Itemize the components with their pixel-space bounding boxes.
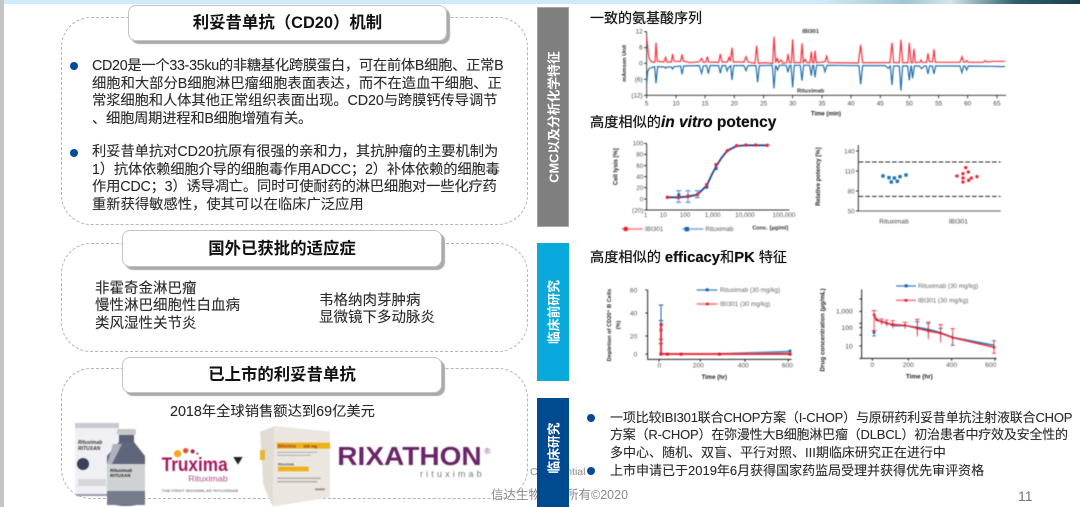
- chart: CD20 B cell depletion: IBI301 (30 mg/kg): [720, 301, 770, 308]
- chart: CD20 B cell depletion: 400: [738, 362, 749, 369]
- text block: CD20 description: CD20是一个33-35ku的非糖基化跨膜蛋白，可在前体B细胞、正常B: [92, 58, 503, 74]
- chart: peptide map chromatogram: 15: [701, 101, 709, 108]
- chart: peptide map chromatogram: 55: [935, 101, 943, 108]
- heading: marketed rituximab: [122, 357, 442, 393]
- chart: cell lysis dose response: 100: [633, 141, 644, 148]
- chart: peptide map chromatogram: (12): [631, 92, 643, 99]
- text block: indications left: 非霍奇金淋巴瘤: [95, 281, 196, 297]
- chart: peptide map chromatogram: 20: [731, 101, 738, 108]
- text block: clinical study: 多中心、随机、双盲、平行对照、III期临床研究正在进行中: [610, 445, 946, 460]
- chart: cell lysis dose response: Cell lysis [%]: [613, 148, 619, 185]
- logo: Rituxan box and vial: RITUXAN: [110, 473, 131, 478]
- chart: drug concentration PK: IBI301 (30 mg/kg): [918, 297, 968, 304]
- logo: Truxima: Rituximab: [188, 473, 228, 483]
- logo: Blitzima box: Rituximab: [278, 462, 294, 466]
- chart: cell lysis dose response: 10: [660, 212, 667, 219]
- text block: CD20 description: 常浆细胞和人体其他正常组织表面出现。CD20与跨膜钙传导调节: [92, 93, 497, 109]
- chart: cell lysis dose response: Conc. [µg/ml]: [752, 225, 788, 231]
- logo: Rituxan box and vial: RITUXAN: [78, 446, 101, 452]
- chart: peptide map chromatogram: 5: [645, 101, 649, 108]
- chart: CD20 B cell depletion: 600: [782, 362, 793, 369]
- logo: Blitzima box: [260, 426, 330, 507]
- chart: peptide map chromatogram: 0: [639, 60, 643, 67]
- chart: peptide map chromatogram: 10: [672, 101, 680, 108]
- chart: relative potency scatter: 110: [845, 168, 855, 175]
- chart: drug concentration PK: Time (hr): [906, 373, 933, 380]
- chart: peptide map chromatogram: 30: [789, 101, 797, 108]
- watermark: confidential: Confidential: [530, 466, 585, 478]
- logo: Rituxan box and vial: Rituximab: [78, 440, 102, 446]
- chart: drug concentration PK: 0: [870, 362, 874, 369]
- text block: filing: 上市申请已于2019年6月获得国家药监局受理并获得优先审评资格: [610, 463, 984, 478]
- heading: in vitro potency: 高度相似的in vitro potency: [590, 114, 776, 131]
- chart: relative potency scatter: IBI301: [949, 218, 968, 225]
- chart: peptide map chromatogram: mAmson Unit: [622, 45, 628, 82]
- logo: Rituxan box and vial: [75, 423, 145, 506]
- text block: rituximab mechanism: 作用CDC；3）诱导凋亡。同时可使耐药的淋巴细胞对一些化疗药: [92, 179, 497, 195]
- logo: Truxima: THE FIRST BIOSIMILAR RITUXIMAB: [162, 489, 239, 493]
- text block: clinical study: [610, 410, 1072, 460]
- chart: CD20 B cell depletion: Time (hr): [702, 375, 727, 381]
- chart: CD20 B cell depletion: Rituximab (30 mg/kg): [720, 287, 780, 294]
- chart: peptide map chromatogram: 65: [993, 101, 1001, 108]
- logo: Rixathon: rituximab: [420, 469, 482, 479]
- chart: cell lysis dose response: 20: [636, 185, 644, 192]
- watermark: copyright: 信达生物版权所有©2020: [491, 488, 628, 502]
- heading: approved indications: 国外已获批的适应症: [208, 240, 356, 258]
- text block: rituximab mechanism: [92, 144, 500, 212]
- chart: cell lysis dose response: [613, 141, 796, 233]
- chart: CD20 B cell depletion: Depletion of CD20⁺ B Cells: [606, 289, 613, 361]
- text block: clinical study: 一项比较IBI301联合CHOP方案（I-CHOP）与原研药利妥昔单抗注射液联合CHOP: [610, 410, 1072, 425]
- logo: Truxima: [162, 448, 243, 493]
- chart: relative potency scatter: [816, 145, 1001, 225]
- chart: peptide map chromatogram: Rituximab: [797, 89, 825, 95]
- heading: efficacy and PK: 高度相似的 efficacy和PK 特征: [590, 250, 787, 266]
- chart: cell lysis dose response: 100: [680, 212, 691, 219]
- text block: indications right: 显微镜下多动脉炎: [319, 310, 435, 326]
- text block: indications left: 类风湿性关节炎: [95, 316, 196, 332]
- heading: approved indications: [122, 230, 442, 267]
- text block: indications left: 慢性淋巴细胞性白血病: [95, 298, 240, 314]
- chart: drug concentration PK: [820, 283, 997, 380]
- chart: peptide map chromatogram: (6): [635, 76, 643, 83]
- chart: relative potency scatter: 50: [848, 208, 855, 215]
- chart: relative potency scatter: Relative potency [%]: [816, 147, 822, 206]
- text block: indications right: 韦格纳肉芽肿病: [319, 293, 420, 309]
- sidebar: clinical: 临床研究: [546, 423, 562, 474]
- logo: Blitzima box: 100 mg: [303, 443, 318, 448]
- chart: CD20 B cell depletion: 200: [693, 362, 704, 369]
- chart: peptide map chromatogram: IBI301: [802, 29, 819, 35]
- sidebar: clinical: [537, 398, 569, 507]
- chart: drug concentration PK: 100: [842, 325, 853, 332]
- chart: cell lysis dose response: 1,000: [705, 212, 721, 219]
- bullet: clinical study: [587, 414, 595, 422]
- bullet: filing: [587, 467, 595, 475]
- chart: peptide map chromatogram: 60: [964, 101, 972, 108]
- chart: cell lysis dose response: 1: [644, 212, 648, 219]
- sidebar: CMC: CMC以及分析化学特征: [546, 51, 562, 183]
- chart: relative potency scatter: Rituximab: [879, 218, 909, 225]
- chart: CD20 B cell depletion: 40: [630, 310, 638, 317]
- chart: drug concentration PK: Drug concentration (µg/mL): [820, 288, 827, 372]
- chart: drug concentration PK: 200: [903, 362, 914, 369]
- chart: peptide map chromatogram: 12: [636, 29, 643, 36]
- heading: mechanism: 利妥昔单抗（CD20）机制: [193, 14, 382, 32]
- chart: drug concentration PK: 10: [845, 343, 853, 350]
- chart: peptide map chromatogram: Time (min): [811, 111, 841, 117]
- chart: cell lysis dose response: (20): [632, 207, 643, 214]
- logo: Truxima: Truxima: [162, 455, 228, 476]
- text block: rituximab mechanism: 重新获得敏感性，使其可以在临床广泛应用: [92, 196, 364, 212]
- chart: cell lysis dose response: 100,000: [773, 212, 796, 219]
- bullet: mechanism: [70, 149, 78, 157]
- sidebar: preclinical: [537, 243, 569, 381]
- chart: drug concentration PK: 400: [946, 362, 958, 369]
- logo: Rixathon: ®: [484, 446, 491, 456]
- bullet: CD20: [70, 62, 78, 70]
- panel: marketed rituximab: [61, 357, 528, 499]
- logo: Rixathon: RIXATHON: [337, 441, 482, 471]
- text block: CD20 description: [92, 58, 504, 126]
- chart: drug concentration PK: 1,000: [836, 309, 853, 316]
- chart: cell lysis dose response: 0: [640, 196, 644, 203]
- chart: relative potency scatter: 80: [848, 188, 855, 195]
- chart: CD20 B cell depletion: 20: [630, 333, 638, 340]
- logo: Blitzima box: Blitzima: [278, 443, 296, 448]
- chart: CD20 B cell depletion: 60: [630, 287, 638, 294]
- page number: 11: [1018, 488, 1033, 504]
- chart: cell lysis dose response: 80: [636, 152, 644, 159]
- chart: CD20 B cell depletion: [606, 287, 793, 381]
- heading: mechanism: [128, 5, 447, 41]
- logo: Rixathon: [337, 441, 491, 479]
- chart: peptide map chromatogram: 25: [760, 101, 768, 108]
- text block: indications left: [95, 280, 240, 332]
- top decorative band: [0, 0, 1080, 4]
- panel: approved indications: [61, 230, 528, 352]
- chart: drug concentration PK: Rituximab (30 mg/kg): [918, 283, 978, 290]
- chart: cell lysis dose response: 10,000: [735, 212, 755, 219]
- panel: CD20 mechanism: [61, 5, 528, 225]
- chart: cell lysis dose response: 60: [636, 163, 644, 170]
- left edge strip: [0, 0, 4, 507]
- text block: CD20 description: 、细胞周期进程和B细胞增殖有关。: [92, 110, 312, 126]
- chart: cell lysis dose response: IBI301: [645, 226, 664, 233]
- heading: marketed rituximab: 已上市的利妥昔单抗: [208, 366, 356, 384]
- chart: CD20 B cell depletion: (%): [616, 320, 622, 329]
- text block: indications right: [319, 292, 435, 326]
- chart: peptide map chromatogram: 40: [847, 101, 855, 108]
- text block: CD20 description: 细胞和大部分B细胞淋巴瘤细胞表面表达，而不在造血干细胞、正: [92, 76, 502, 92]
- text block: rituximab mechanism: 利妥昔单抗对CD20抗原有很强的亲和力，其抗肿瘤的主要机制为: [92, 144, 498, 160]
- chart: peptide map chromatogram: [622, 29, 1006, 117]
- chart: peptide map chromatogram: 50: [906, 101, 913, 108]
- text block: rituximab mechanism: 1）抗体依赖细胞介导的细胞毒作用ADCC；2）补体依赖的细胞毒: [92, 162, 500, 178]
- heading: amino acid sequence: 一致的氨基酸序列: [590, 10, 702, 26]
- chart: peptide map chromatogram: 35: [818, 101, 826, 108]
- chart: peptide map chromatogram: 45: [877, 101, 884, 108]
- logo: Rituxan box and vial: Rituximab: [110, 468, 132, 473]
- sidebar: CMC: [537, 7, 569, 227]
- text block: sales: 2018年全球销售额达到69亿美元: [170, 404, 375, 420]
- chart: peptide map chromatogram: 6: [639, 45, 643, 52]
- text block: clinical study: 方案（R-CHOP）在弥漫性大B细胞淋巴瘤（DLBCL）初治患者中疗效及安全性的: [610, 427, 1068, 442]
- chart: drug concentration PK: 600: [985, 362, 996, 369]
- chart: cell lysis dose response: 40: [636, 174, 644, 181]
- chart: CD20 B cell depletion: 0: [657, 362, 661, 369]
- chart: cell lysis dose response: Rituximab: [705, 226, 734, 233]
- chart: relative potency scatter: 140: [844, 148, 855, 155]
- chart: CD20 B cell depletion: 0: [634, 351, 638, 358]
- sidebar: preclinical: 临床前研究: [546, 280, 562, 344]
